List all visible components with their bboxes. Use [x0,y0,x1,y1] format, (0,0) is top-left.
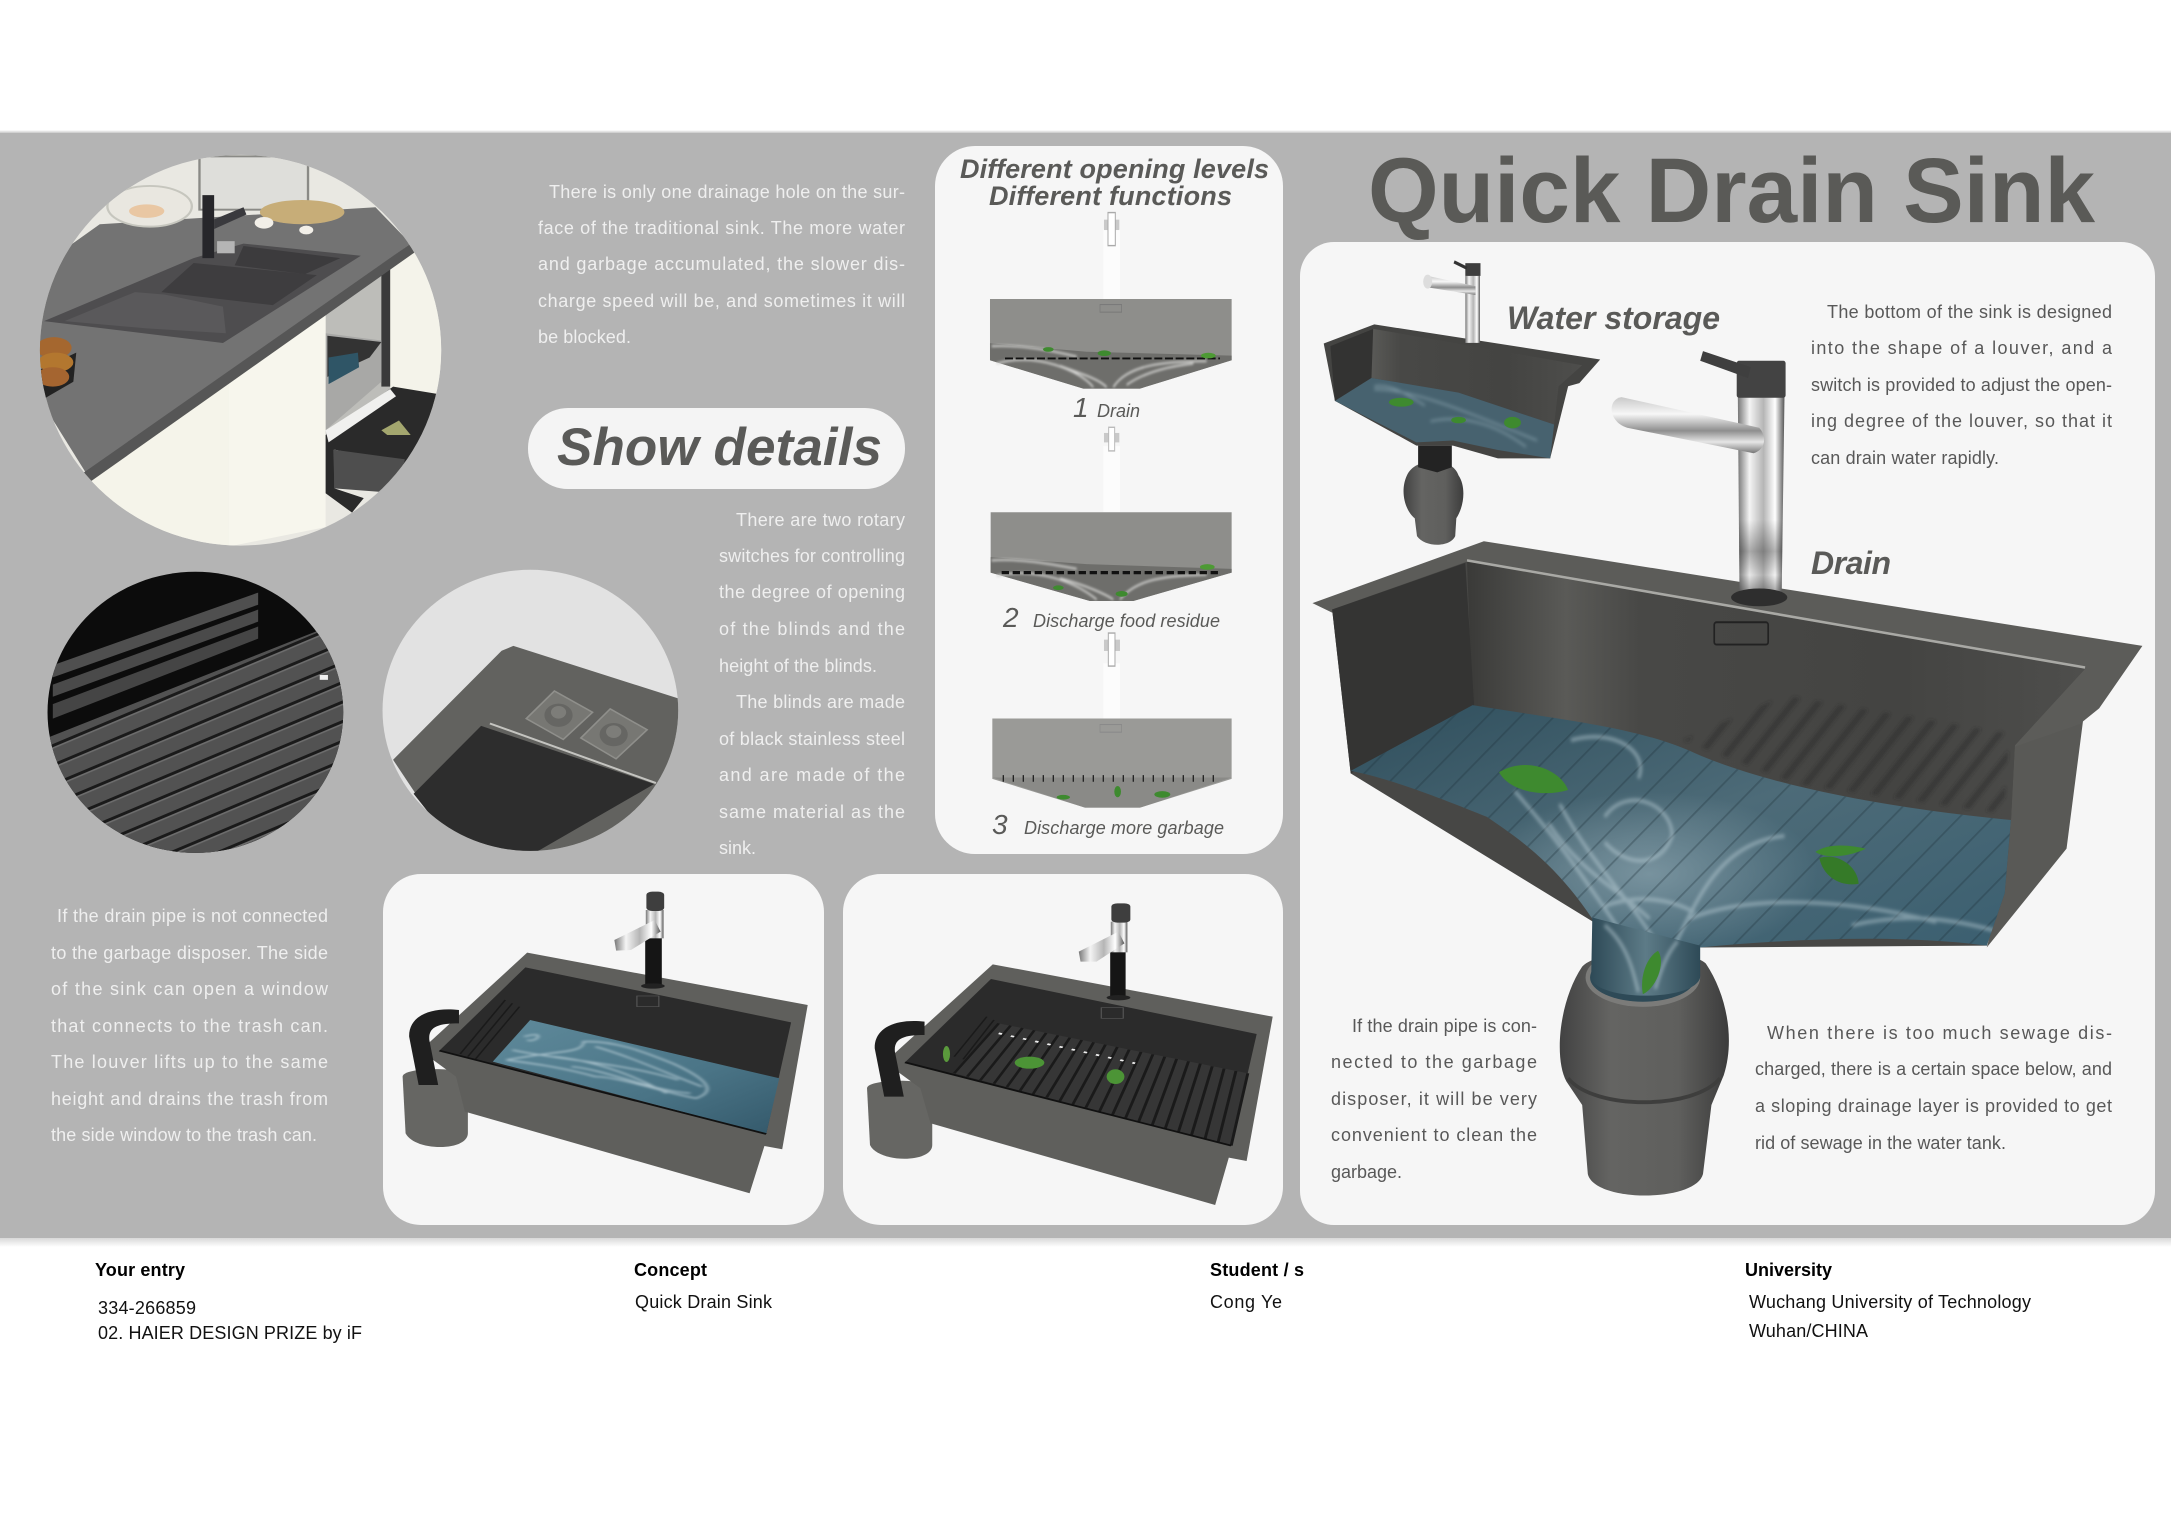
title: Quick Drain Sink [1368,140,2096,242]
faucet [614,892,665,989]
switch right [581,709,647,759]
footer: concept: Quick Drain Sink [635,1292,773,1312]
text block: louver bottom: into the shape of a louver, and a [1811,338,2113,358]
faucet [1423,262,1480,343]
louver slats [954,1023,1248,1146]
text block: traditional sink problem: charge speed will be, and sometimes it will [538,291,905,311]
label 1 [1073,392,1140,423]
panel heading: Different opening levels [960,154,1269,184]
footer: your entry: Your entry [95,1260,185,1280]
text block: disposer connection: garbage. [1331,1162,1402,1182]
panel: opening levels [935,146,1283,854]
text block: rotary switches and blinds: height of the blinds. [719,656,877,676]
text block: side window to trash can: The louver lifts up to the same [51,1052,328,1072]
text block: disposer connection: disposer, it will be very [1331,1089,1537,1109]
text block: rotary switches and blinds: the degree of opening [719,582,905,602]
heading pill: show details: Show details [557,418,882,477]
faucet [1079,903,1130,1000]
small sink: water storage [1324,262,1600,545]
text block: disposer connection: nected to the garbage [1331,1052,1537,1072]
text block: disposer connection: convenient to clean the [1331,1125,1537,1145]
text block: traditional sink problem: and garbage accumulated, the slower dis- [538,254,905,274]
panel: main sink views [1300,242,2155,1225]
footer: students: Cong Ye [1210,1292,1282,1312]
footer: university: Wuhan/CHINA [1749,1321,1868,1341]
footer: concept: Concept [634,1260,707,1280]
diagram 1: drain [990,213,1232,389]
text block: rotary switches and blinds: The blinds are made [736,692,905,712]
text block: louver bottom [1811,302,2113,468]
text block: traditional sink problem: be blocked. [538,327,631,347]
label 1: Drain [1097,401,1140,421]
photo circle: louver close-up [48,572,344,853]
text block: disposer connection [1331,1016,1537,1182]
label 2 [1002,602,1220,633]
text block: side window to trash can: to the garbage disposer. The side [51,943,328,963]
side drain pipe [409,1009,459,1085]
panel: sink with water and trash can [383,874,824,1225]
footer: concept [634,1260,773,1312]
drain pipe with water [1591,918,1700,996]
footer: students [1210,1260,1304,1312]
grey background band [0,130,2171,1247]
photo circle: kitchen countertop with sink [35,149,446,551]
switch left [526,691,593,739]
text block: rotary switches and blinds: of the blinds and the [719,619,905,639]
text block: sewage space [1755,1023,2112,1153]
leaves [1499,765,1866,994]
text block: side window to trash can: the side window to the trash can. [51,1125,317,1145]
faucet [1612,351,1787,606]
footer: university: University [1745,1260,1832,1280]
text block: disposer connection: If the drain pipe is con- [1352,1016,1537,1036]
text block: rotary switches and blinds: switches for controlling [719,546,905,566]
text block: side window to trash can [51,906,329,1145]
footer: your entry [95,1260,362,1343]
leaves [1389,398,1521,428]
trash can [403,1069,468,1147]
text block: rotary switches and blinds: There are two rotary [736,510,905,530]
text block: rotary switches and blinds: sink. [719,838,756,858]
large sink: drain cutaway [1312,351,2142,1195]
panel heading [960,154,1269,211]
footer: your entry: 334-266859 [98,1298,196,1318]
photo circle: rotary switches close-up [375,566,686,857]
text block: rotary switches and blinds: same material as the [719,802,905,822]
text block: sewage space: When there is too much sewage dis- [1767,1023,2112,1043]
label 3: Discharge more garbage [1024,818,1224,838]
text block: traditional sink problem [538,182,905,347]
text block: side window to trash can: If the drain pipe is not connected [57,906,328,926]
water surface [1346,702,2015,957]
text block: traditional sink problem: There is only one drainage hole on the sur- [549,182,905,202]
heading: drain: Drain [1811,545,1891,581]
label 1: 1 [1073,392,1089,423]
text block: rotary switches and blinds [719,510,905,858]
label 3: 3 [992,809,1008,840]
text block: louver bottom: ing degree of the louver, so that it [1811,411,2112,431]
label 2: 2 [1002,602,1019,633]
diagram 3: discharge more garbage [992,633,1232,808]
text block: louver bottom: can drain water rapidly. [1811,448,1999,468]
diagram 2: discharge food residue [991,427,1232,601]
panel heading: Different functions [989,181,1232,211]
footer: students: Student / s [1210,1260,1304,1280]
garbage disposer [1560,948,1729,1195]
panel: sink with louver open [843,874,1283,1225]
footer: university: Wuchang University of Technology [1749,1292,2031,1312]
footer: your entry: 02. HAIER DESIGN PRIZE by iF [98,1323,362,1343]
text block: sewage space: a sloping drainage layer is provided to get [1755,1096,2112,1116]
leaves [943,1046,1124,1084]
label 2: Discharge food residue [1033,611,1220,631]
text block: traditional sink problem: face of the traditional sink. The more water [538,218,905,238]
side drain pipe [875,1021,925,1097]
overflow slot [1714,622,1768,645]
text block: sewage space: charged, there is a certain space below, and [1755,1059,2112,1079]
trash can [867,1081,932,1159]
heading: water storage: Water storage [1507,300,1720,336]
label 3 [992,809,1224,840]
text block: sewage space: rid of sewage in the water tank. [1755,1133,2006,1153]
text block: side window to trash can: of the sink can open a window [51,979,329,999]
text block: louver bottom: The bottom of the sink is designed [1827,302,2112,322]
text block: side window to trash can: height and drains the trash from [51,1089,328,1109]
heading pill: show details [528,408,905,489]
footer: university [1745,1260,2031,1341]
text block: rotary switches and blinds: and are made of the [719,765,905,785]
text block: side window to trash can: that connects to the trash can. [51,1016,328,1036]
text block: rotary switches and blinds: of black stainless steel [719,729,905,749]
text block: louver bottom: switch is provided to adjust the open- [1811,375,2112,395]
